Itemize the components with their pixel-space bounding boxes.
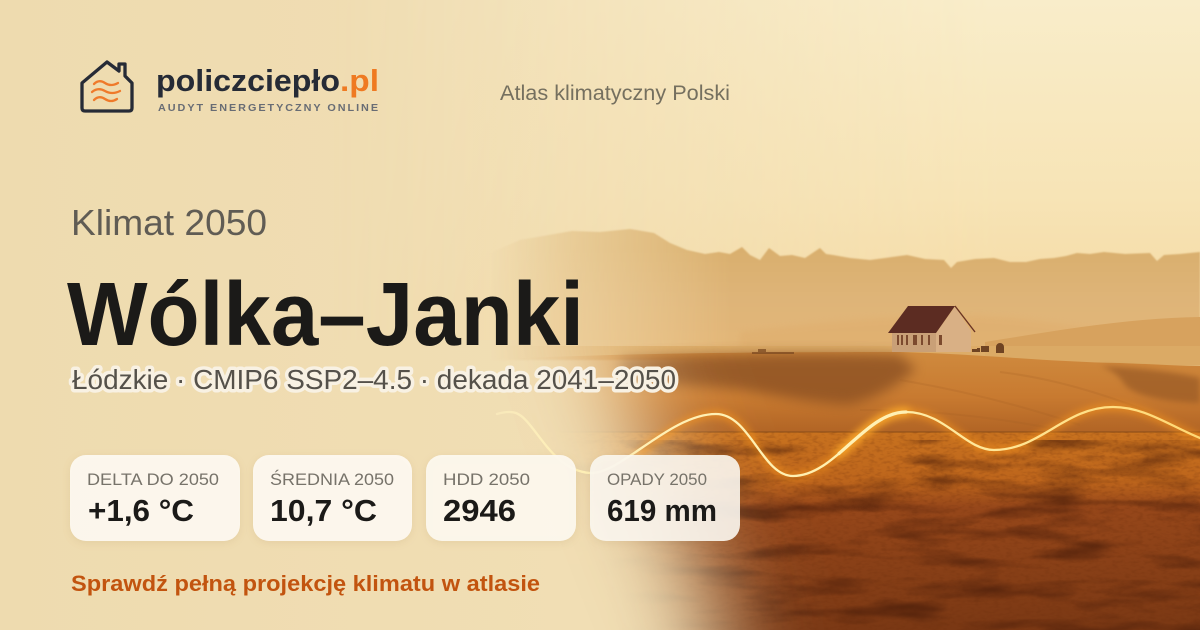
title: Wólka–Janki	[67, 265, 584, 365]
call to action: Sprawdź pełną projekcję klimatu w atlasie	[71, 571, 540, 596]
stat cards	[70, 455, 740, 541]
sky glow	[586, 0, 1200, 266]
card: average	[253, 455, 412, 541]
logo wordmark: policzciepło	[156, 63, 340, 98]
house windows	[897, 335, 942, 345]
icon: house with heat waves	[82, 62, 132, 111]
gable edge	[955, 306, 975, 332]
card: HDD: HDD 2050	[443, 471, 530, 489]
logo domain: .pl	[340, 63, 379, 98]
card: precipitation: OPADY 2050	[607, 471, 707, 489]
field dark patches	[625, 440, 1200, 630]
card: delta: DELTA DO 2050	[87, 471, 219, 489]
card: delta	[70, 455, 240, 541]
wave core	[497, 407, 1200, 476]
card: HDD: 2946	[443, 493, 516, 528]
card: precipitation	[590, 455, 740, 541]
wave hot section glow	[839, 412, 906, 454]
dune shadow by the house	[620, 354, 916, 405]
wave hot core	[839, 412, 906, 454]
distant treeline and haze	[470, 229, 1200, 365]
card: average: ŚREDNIA 2050	[270, 470, 394, 489]
card: average: 10,7 °C	[270, 493, 377, 528]
treeline	[470, 229, 1200, 360]
card: HDD	[426, 455, 576, 541]
foreground field	[570, 432, 1200, 630]
rolling dune field	[556, 352, 1200, 432]
eyebrow: Klimat 2050	[71, 202, 267, 243]
wave glow	[640, 407, 1200, 476]
distant shed	[752, 349, 794, 354]
hazy mid hill	[740, 316, 1110, 360]
card: precipitation: 619 mm	[607, 493, 717, 528]
house roof	[888, 306, 955, 333]
glowing wave line	[497, 407, 1200, 476]
house gable wall	[936, 307, 971, 352]
landscape photo panel	[480, 306, 1200, 630]
header label: Atlas klimatyczny Polski	[500, 82, 730, 105]
horizon strip	[568, 346, 1200, 366]
card: delta: +1,6 °C	[88, 493, 194, 528]
house side wall	[892, 332, 937, 352]
dune furrows	[916, 372, 1102, 394]
house	[752, 306, 1004, 354]
field boundary	[560, 431, 1200, 433]
garden shrubs	[972, 343, 1004, 353]
far right hill	[985, 317, 1200, 365]
subtitle with halo: Łódzkie · CMIP6 SSP2–4.5 · dekada 2041–2050	[72, 364, 676, 395]
field grain	[640, 432, 1200, 557]
right dune shadow	[1100, 366, 1200, 403]
logo	[82, 62, 380, 114]
logo tagline: AUDYT ENERGETYCZNY ONLINE	[158, 102, 380, 114]
